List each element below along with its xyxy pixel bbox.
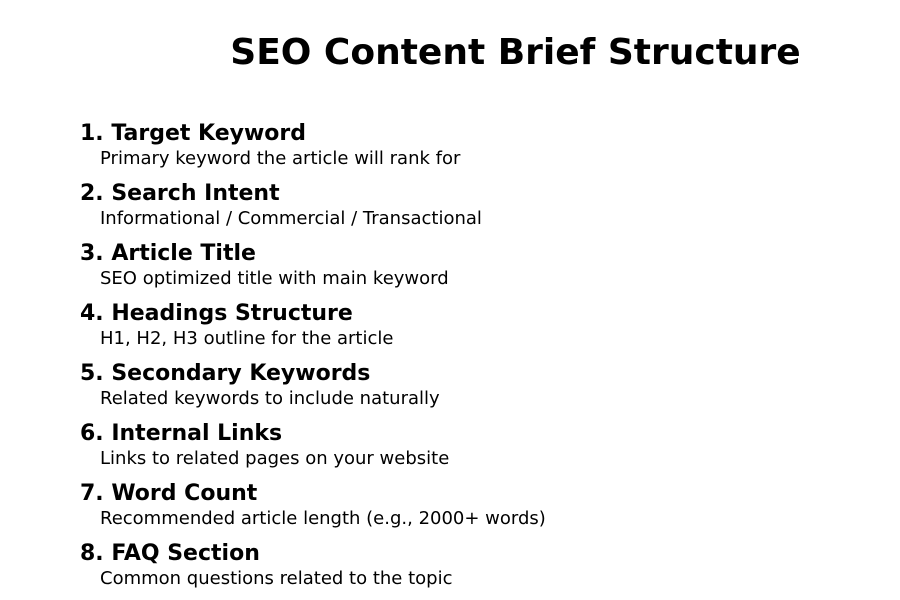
item 5 xyxy=(80,361,440,409)
item 4: 4. Headings Structure xyxy=(80,301,353,326)
item 6: Links to related pages on your website xyxy=(100,448,449,469)
item 4: H1, H2, H3 outline for the article xyxy=(100,328,393,349)
item 2: 2. Search Intent xyxy=(80,181,280,206)
item 5: Related keywords to include naturally xyxy=(100,388,440,409)
item 7: Recommended article length (e.g., 2000+ words) xyxy=(100,508,546,529)
item 8: Common questions related to the topic xyxy=(100,568,452,589)
item 7 xyxy=(80,481,546,529)
item 5: 5. Secondary Keywords xyxy=(80,361,370,386)
item 2: Informational / Commercial / Transactional xyxy=(100,208,482,229)
item 3: 3. Article Title xyxy=(80,241,256,266)
item 8 xyxy=(80,541,452,589)
item 3: SEO optimized title with main keyword xyxy=(100,268,449,289)
item 1: 1. Target Keyword xyxy=(80,121,306,146)
item 1: Primary keyword the article will rank for xyxy=(100,148,460,169)
item 3 xyxy=(80,241,449,289)
item 6: 6. Internal Links xyxy=(80,421,282,446)
item 4 xyxy=(80,301,393,349)
title: SEO Content Brief Structure xyxy=(230,32,801,73)
item 8: 8. FAQ Section xyxy=(80,541,260,566)
item 6 xyxy=(80,421,449,469)
item 1 xyxy=(80,121,460,169)
item 7: 7. Word Count xyxy=(80,481,257,506)
item 2 xyxy=(80,181,482,229)
